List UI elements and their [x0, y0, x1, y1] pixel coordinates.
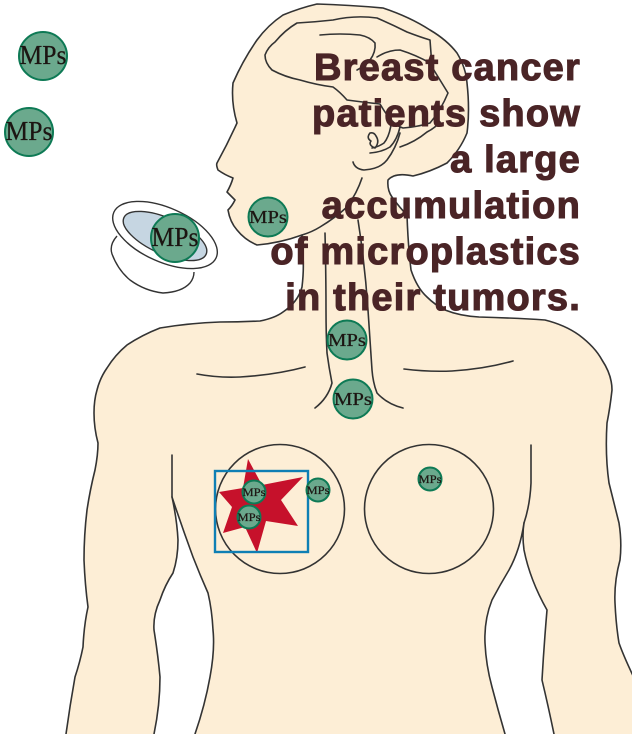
headline: [270, 47, 581, 319]
MPs particle: top left: MPs: [20, 40, 66, 70]
tumor star: [219, 459, 303, 553]
headline: in their tumors.: [285, 277, 581, 319]
collarbones: [197, 361, 513, 377]
MPs particle: left: MPs: [6, 116, 52, 146]
blue detection box: [215, 471, 308, 552]
headline: Breast cancer: [314, 47, 581, 89]
MPs particle: mouth: [248, 198, 288, 236]
neck lines: [315, 220, 403, 408]
ear: [353, 122, 440, 170]
headline: a large: [450, 139, 581, 181]
MPs particle: tumor lower: MPs: [238, 510, 261, 524]
MPs particle: in bowl: [151, 214, 199, 262]
brain folds: [265, 17, 448, 128]
headline: accumulation: [322, 185, 581, 227]
MPs particle: in bowl: MPs: [152, 222, 198, 252]
headline: of microplastics: [270, 231, 581, 273]
MPs particle: upper esophagus: MPs: [328, 330, 366, 350]
breast outlines: [216, 444, 494, 574]
MPs particle: mouth: MPs: [249, 207, 287, 227]
MPs particle: beside tumor: MPs: [306, 483, 330, 497]
bowl: [103, 188, 227, 293]
MPs particle: right breast: MPs: [418, 472, 442, 486]
MPs particle: tumor lower: [238, 506, 261, 528]
headline: patients show: [312, 93, 581, 135]
MPs particle: left: [5, 108, 53, 156]
MPs particle: tumor upper: [242, 480, 266, 504]
jaw line: [302, 178, 362, 235]
MPs particle: lower esophagus: MPs: [334, 389, 372, 409]
MPs particle: upper esophagus: [328, 320, 366, 360]
MPs particle: right breast: [418, 468, 442, 490]
MPs particle: tumor upper: MPs: [242, 485, 266, 499]
MPs particle: lower esophagus: [334, 380, 372, 418]
underarm lines: [172, 445, 531, 523]
MPs particle: top left: [19, 32, 67, 80]
MPs particle: beside tumor: [306, 478, 330, 502]
